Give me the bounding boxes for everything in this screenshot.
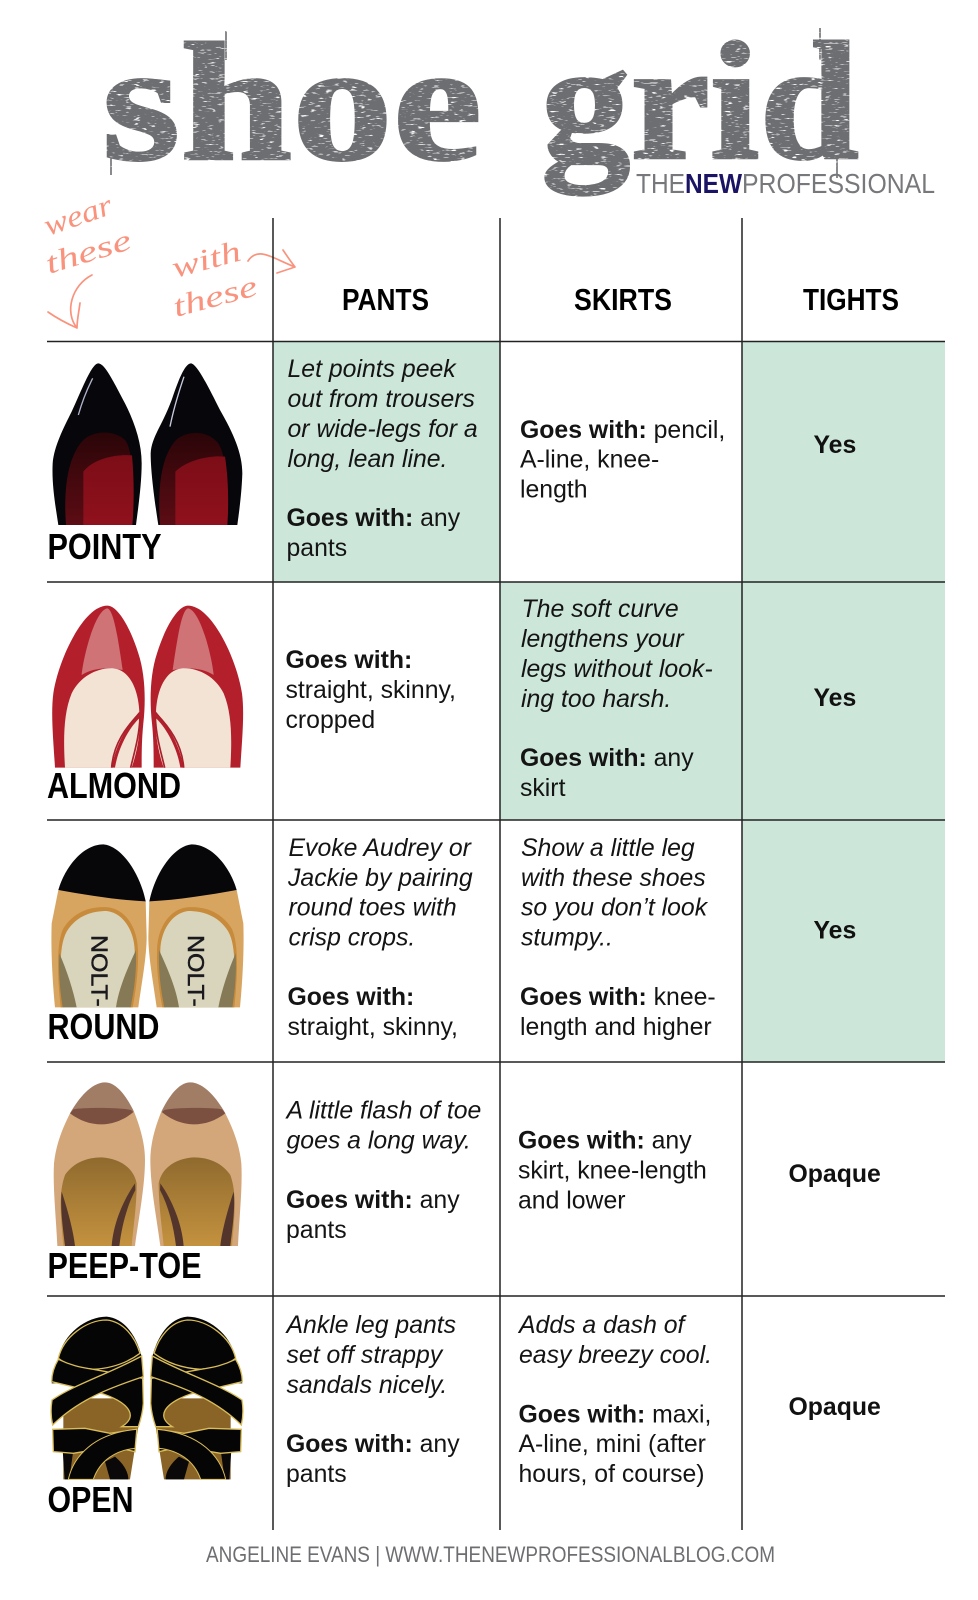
brand: The New Professional: PROFESSIONAL <box>742 168 935 199</box>
column header: tights: TIGHTS <box>803 282 899 317</box>
label: pointy: POINTY <box>48 526 162 567</box>
cell: open skirts: A-line, mini (after <box>518 1431 706 1458</box>
cell: almond pants: straight, skinny, <box>286 677 456 704</box>
cell: open tights: Opaque <box>788 1394 881 1421</box>
label: almond: ALMOND <box>47 765 181 806</box>
cell: open skirts: Adds a dash of <box>517 1312 688 1339</box>
cell: peep-toe pants: goes a long way. <box>286 1128 471 1154</box>
cell: almond skirts <box>520 596 713 802</box>
cell: peep-toe skirts: and lower <box>518 1188 626 1214</box>
shoe: pointy <box>52 363 242 525</box>
cell: peep-toe pants: pants <box>286 1217 347 1244</box>
cell: pointy skirts <box>520 417 725 504</box>
label: peep-toe: PEEP-TOE <box>48 1245 202 1286</box>
cell: pointy pants: Let points peek <box>288 356 457 383</box>
cell: open skirts: hours, of course) <box>518 1461 705 1488</box>
brand: The New Professional: NEW <box>685 168 742 199</box>
cell: pointy pants <box>286 356 478 562</box>
cell: almond skirts: ing too harsh. <box>521 686 671 713</box>
cell: pointy pants: long, lean line. <box>288 446 447 473</box>
title: shoe grid: shoe <box>102 8 482 196</box>
cell: open pants: pants <box>286 1461 347 1488</box>
cell: almond tights: Yes <box>814 685 856 712</box>
cell: round pants: Evoke Audrey or <box>288 835 473 862</box>
cell: almond skirts: legs without look- <box>521 656 713 683</box>
cell: round tights: Yes <box>814 918 856 944</box>
cell: pointy skirts: Goes with: pencil, <box>520 417 725 444</box>
cell: round skirts: length and higher <box>520 1014 712 1041</box>
cell: open pants: Goes with: any <box>286 1431 460 1458</box>
cell: open skirts: Goes with: maxi, <box>518 1402 711 1428</box>
cell: open pants: sandals nicely. <box>286 1372 447 1399</box>
cell: open pants: Ankle leg pants <box>284 1312 456 1339</box>
arrow: right <box>248 250 295 273</box>
cell: round pants: Goes with: <box>288 984 414 1011</box>
cell: round pants <box>287 835 473 1041</box>
shoe: almond <box>52 606 243 768</box>
shoe: open <box>51 1317 243 1479</box>
cell: peep-toe skirts: skirt, knee-length <box>518 1158 707 1184</box>
cell: pointy skirts: length <box>520 476 588 504</box>
handwritten note: with these <box>168 235 261 324</box>
shoe: peep-toe <box>54 1082 242 1246</box>
cell: open skirts <box>517 1312 712 1488</box>
cell: almond pants <box>286 647 456 734</box>
cell: almond skirts: skirt <box>520 775 566 802</box>
cell: pointy pants: out from trousers <box>288 386 475 413</box>
handwritten note: with these: these <box>169 270 261 324</box>
brand: The New Professional <box>636 168 935 199</box>
cell: peep-toe pants: Goes with: any <box>286 1187 460 1214</box>
cell: round skirts: stumpy.. <box>521 924 613 952</box>
shoe: round: NOLT- <box>86 935 112 1007</box>
footer credit: ANGELINE EVANS | WWW.THENEWPROFESSIONALBLOG.COM <box>206 1542 775 1567</box>
cell: open pants: set off strappy <box>286 1342 444 1369</box>
handwritten note: with these: with <box>168 235 244 285</box>
cell: almond pants: cropped <box>286 707 375 734</box>
green highlighted cells <box>273 342 945 1062</box>
handwritten note: wear these: these <box>41 223 135 281</box>
column header: skirts: SKIRTS <box>574 282 672 317</box>
cell: peep-toe tights: Opaque <box>788 1161 881 1188</box>
cell: round pants: round toes with <box>288 894 457 922</box>
cell: pointy tights: Yes <box>814 432 856 459</box>
cell: peep-toe pants <box>284 1098 481 1244</box>
column header: pants: PANTS <box>342 282 429 317</box>
cell: pointy pants: Goes with: any <box>286 505 461 532</box>
cell: round skirts: Goes with: knee- <box>520 984 716 1011</box>
cell: round pants: straight, skinny, <box>288 1014 458 1041</box>
cell: open pants <box>284 1312 460 1488</box>
title: shoe grid <box>102 7 859 196</box>
cell: round skirts: with these shoes <box>521 865 706 892</box>
cell: pointy skirts: A-line, knee- <box>520 446 659 474</box>
shoe: round: NOLT- <box>183 935 209 1007</box>
label: round: ROUND <box>48 1006 160 1047</box>
label: open: OPEN <box>48 1479 134 1520</box>
cell: almond skirts: lengthens your <box>521 626 685 653</box>
cell: round skirts <box>520 835 716 1041</box>
shoe: round <box>51 844 244 1007</box>
brand: The New Professional: THE <box>636 168 685 199</box>
cell: round pants: crisp crops. <box>288 924 415 952</box>
table grid lines <box>47 218 945 1530</box>
handwritten note: wear these <box>40 189 135 281</box>
handwritten note: wear these: wear <box>40 189 117 243</box>
cell: open skirts: easy breezy cool. <box>519 1342 712 1369</box>
cell: peep-toe skirts: Goes with: any <box>518 1128 692 1154</box>
cell: peep-toe pants: A little flash of toe <box>284 1098 481 1124</box>
cell: pointy pants: or wide-legs for a <box>288 416 478 443</box>
cell: almond skirts: Goes with: any <box>520 745 694 772</box>
cell: almond skirts: The soft curve <box>522 596 679 623</box>
cell: round pants: Jackie by pairing <box>287 865 473 892</box>
title: shoe grid: grid <box>541 7 859 195</box>
cell: round skirts: Show a little leg <box>521 835 695 862</box>
cell: peep-toe skirts <box>518 1128 707 1214</box>
cell: almond pants: Goes with: <box>286 647 412 674</box>
arrow: down <box>48 275 92 328</box>
cell: round skirts: so you don’t look <box>521 894 709 922</box>
cell: pointy pants: pants <box>286 535 347 562</box>
